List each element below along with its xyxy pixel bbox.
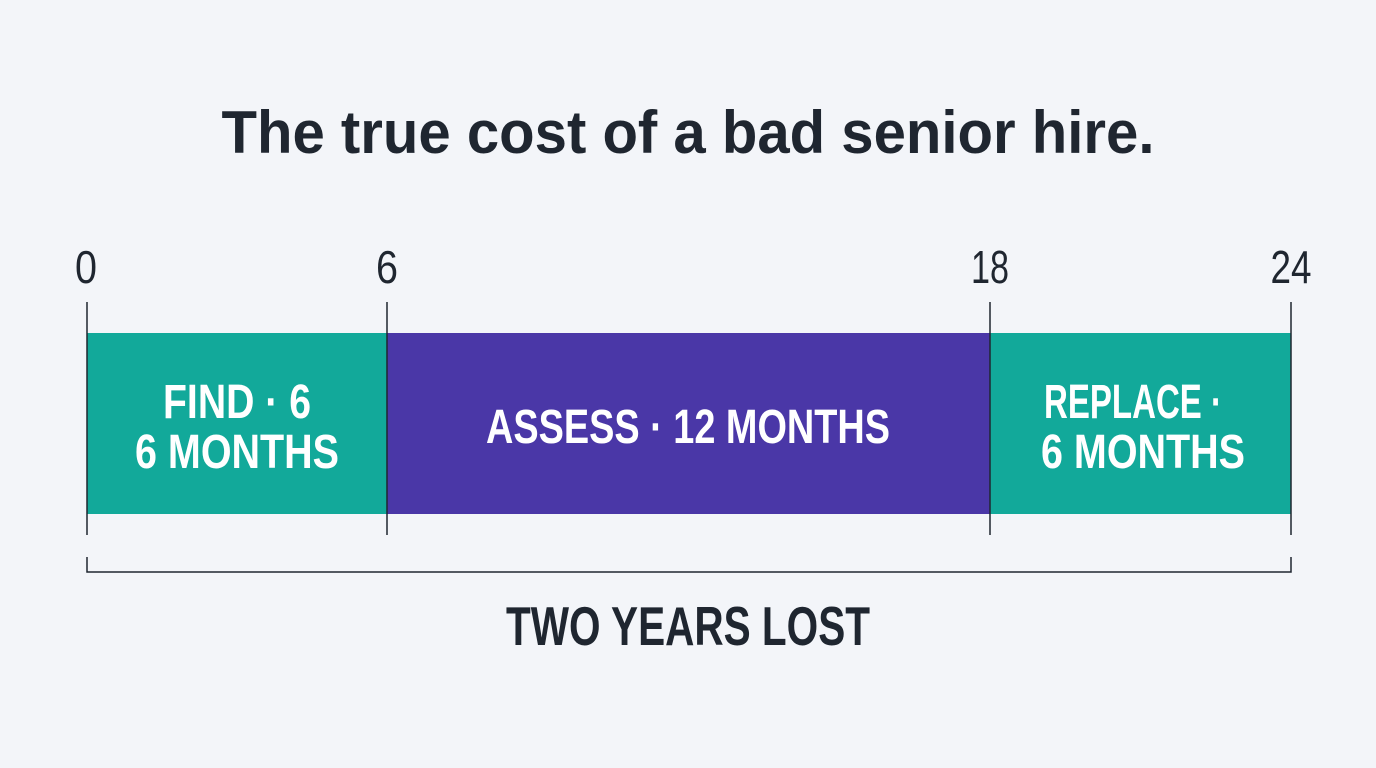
bar: find: 6 MONTHS [135,426,339,479]
total label: TWO YEARS LOST [506,595,870,657]
bar: replace [990,333,1291,514]
bar: replace: 6 MONTHS [1041,426,1245,479]
bar: find: FIND · 6 [163,376,311,429]
axis tick labels: 18 [971,241,1009,293]
bracket [87,557,1291,572]
axis tick labels: 0 [75,241,97,293]
axis tick labels [75,241,1312,293]
title: The true cost of a bad senior hire. [222,99,1154,166]
bar: find [87,333,387,514]
bar: replace: REPLACE · [1044,376,1222,429]
bar: assess [387,333,990,514]
axis tick labels: 24 [1270,241,1312,293]
bar: assess: ASSESS · 12 MONTHS [486,401,890,454]
axis tick labels: 6 [376,241,398,293]
